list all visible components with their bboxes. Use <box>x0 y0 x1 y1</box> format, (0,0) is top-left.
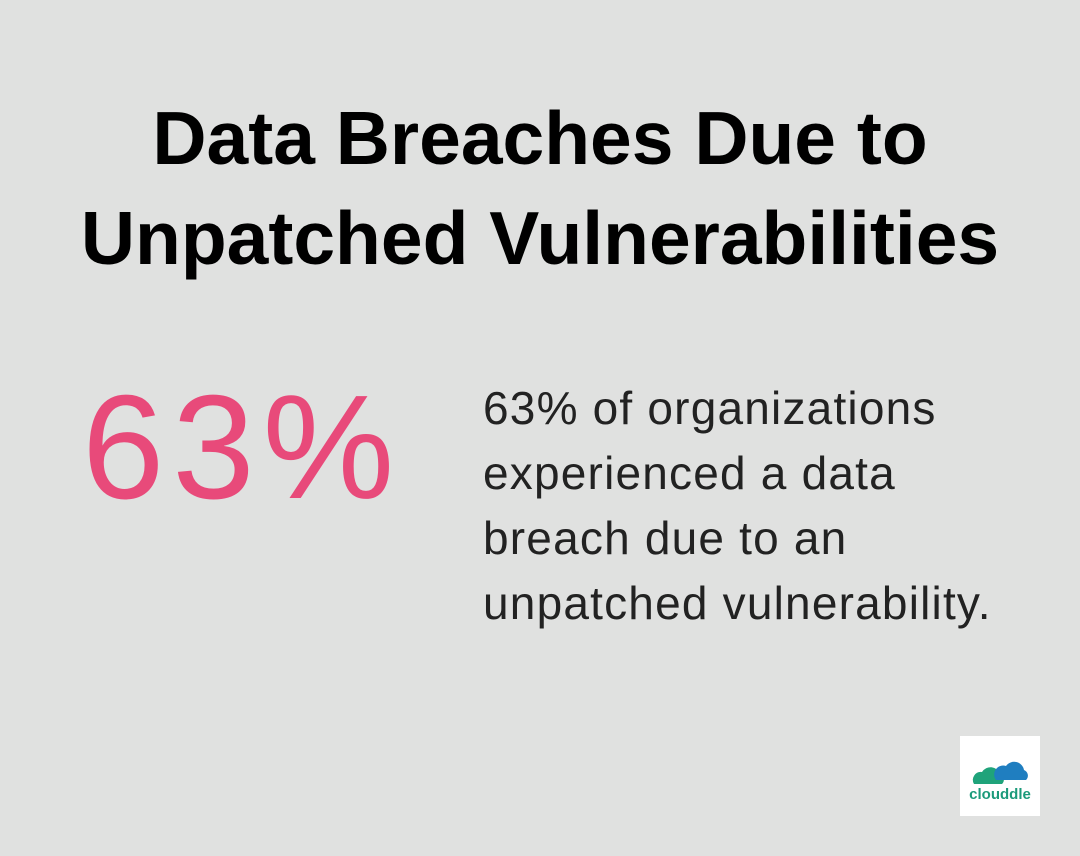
icon: clouds <box>973 762 1028 784</box>
description text <box>483 382 992 629</box>
title: Data Breaches Due to <box>152 96 928 180</box>
title: Unpatched Vulnerabilities <box>81 196 999 280</box>
description text: experienced a data <box>483 447 896 499</box>
description text: 63% of organizations <box>483 382 937 434</box>
logo <box>960 736 1040 816</box>
title <box>81 96 999 280</box>
logo text: clouddle <box>969 786 1031 803</box>
big stat: 63% <box>82 365 402 530</box>
description text: unpatched vulnerability. <box>483 577 992 629</box>
description text: breach due to an <box>483 512 847 564</box>
